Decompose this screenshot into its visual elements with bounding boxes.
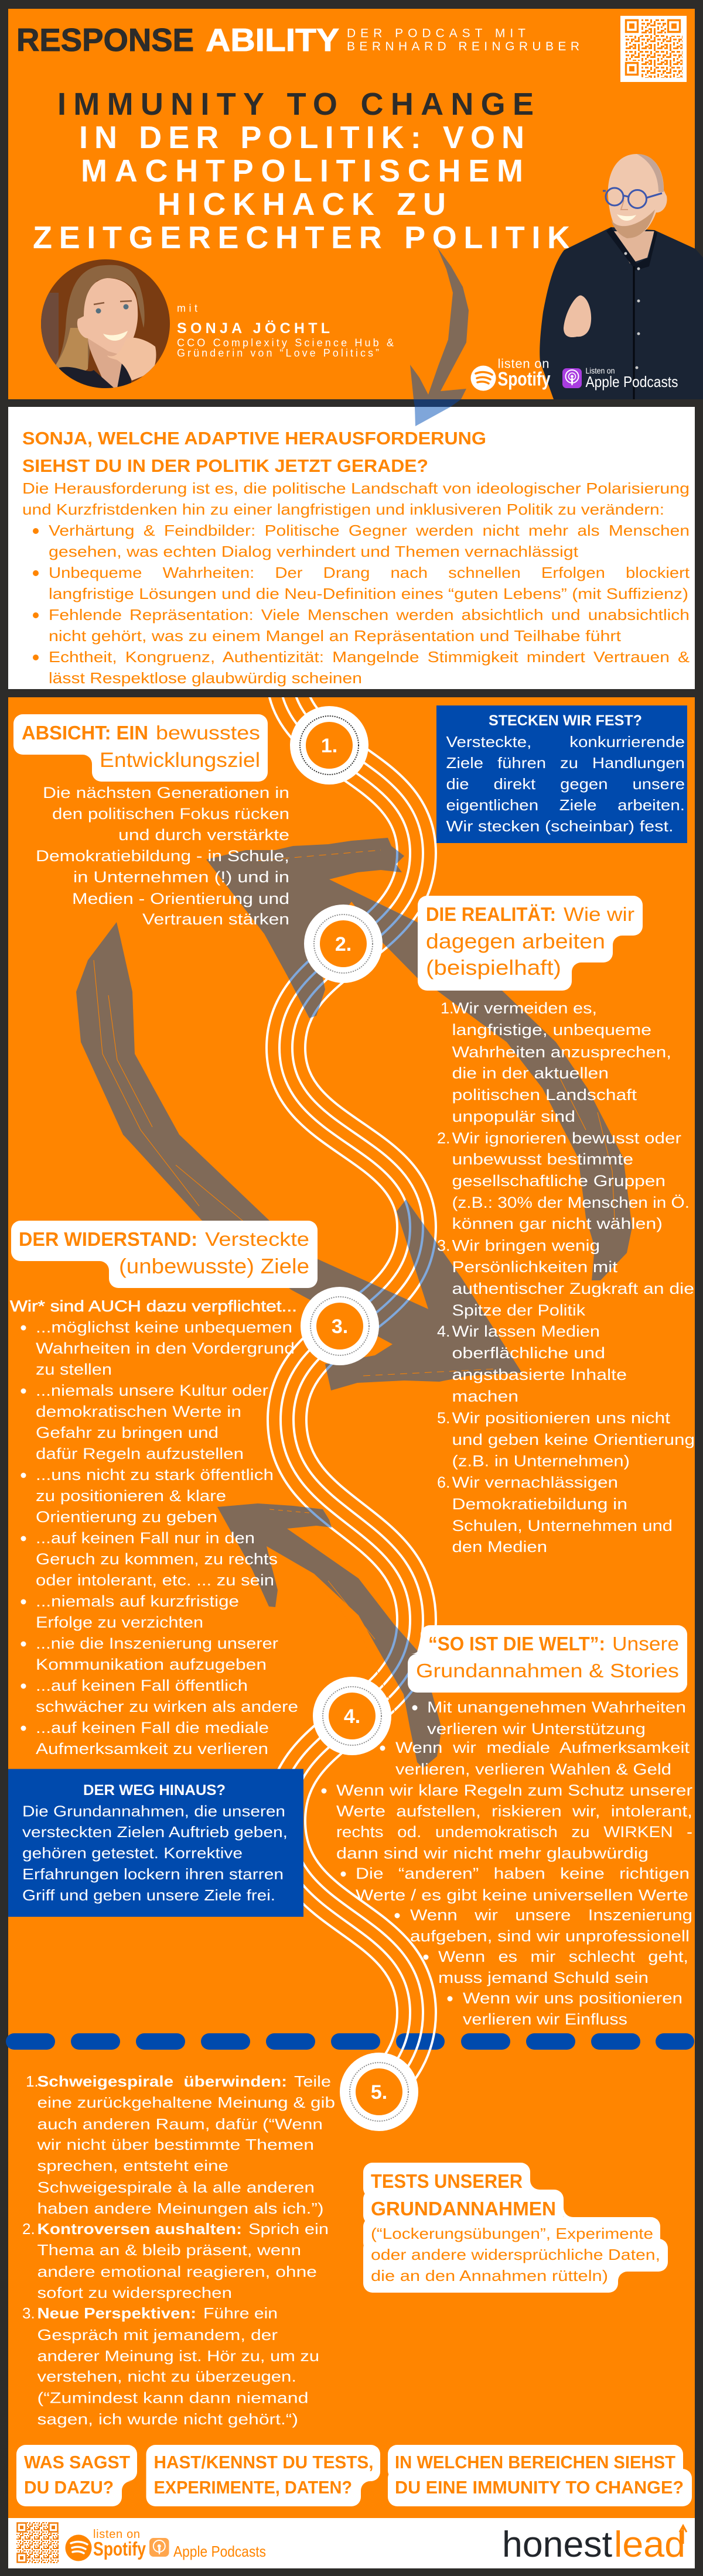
- wavy path lines: [286, 673, 417, 2092]
- list: hidden commitments: ...auf keinen Fall nur in den: [36, 1529, 255, 1547]
- step marker 5: [340, 2053, 418, 2131]
- list: assumptions and stories: Werte / es gibt keine universellen Werte: [356, 1886, 688, 1904]
- dashed divider: [6, 2033, 694, 2050]
- heading box: tests of assumptions: GRUNDANNAHMEN: [371, 2198, 556, 2219]
- numbered list: reality: authentischer Zugkraft an die: [452, 1280, 694, 1297]
- question box: tests and data: [146, 2445, 380, 2506]
- list: assumptions and stories: verlieren, verlieren Wahlen & Geld: [395, 1760, 671, 1778]
- numbered list: reality: unbewusst bestimmte: [452, 1150, 633, 1168]
- numbered list: reality: oberflächliche und: [452, 1344, 605, 1362]
- numbered list: reality: [437, 999, 695, 1556]
- presenter photo: Bernhard: [540, 154, 703, 399]
- heading box: assumptions: “SO IST DIE WELT”:: [428, 1633, 605, 1654]
- list: assumptions and stories: Die “anderen” haben keine richtigen: [356, 1865, 690, 1882]
- callout: stuck question: eigentlichen Ziele arbeiten.: [446, 796, 685, 814]
- heading box: assumptions: Grundannahmen & Stories: [416, 1660, 679, 1681]
- heading box: assumptions: Unsere: [612, 1633, 679, 1654]
- numbered list: exercises: sofort zu widersprechen: [37, 2284, 232, 2301]
- title: IN DER POLITIK: VON: [79, 120, 524, 155]
- heading box: intention: Entwicklungsziel: [100, 749, 260, 772]
- callout: the way out: gehören getestet. Korrektive: [22, 1844, 243, 1862]
- numbered list: exercises: (“Zumindest kann dann niemand: [37, 2389, 308, 2406]
- challenge bullet list: [33, 522, 690, 687]
- callout: the way out: Griff und geben unsere Ziele frei.: [22, 1886, 275, 1904]
- podcast brand wordmark: ABILITY: [206, 22, 339, 58]
- numbered list: reality: 3.: [437, 1236, 451, 1254]
- heading box: intention: ABSICHT: EIN: [22, 722, 148, 744]
- footer Spotify badge: Spotify: [93, 2538, 146, 2560]
- callout: stuck question: [436, 705, 687, 843]
- numbered list: reality: 1.: [441, 999, 454, 1017]
- numbered list: reality: politischen Landschaft: [452, 1086, 637, 1104]
- panel: footer: [8, 2518, 695, 2568]
- Apple Podcasts badge: Apple Podcasts: [586, 373, 678, 390]
- heading box: reality: DIE REALITÄT:: [426, 903, 556, 925]
- heading box: resistance: [11, 1221, 318, 1288]
- step marker 1: 1.: [321, 735, 337, 757]
- heading box: tests of assumptions: (“Lockerungsübungen”, Experimente: [371, 2225, 653, 2242]
- step marker 1: [290, 706, 368, 785]
- callout: stuck question: die direkt gegen unsere: [446, 775, 685, 793]
- numbered list: exercises: verstehen, nicht zu überzeugen.: [37, 2368, 296, 2385]
- numbered list: reality: machen: [452, 1388, 518, 1405]
- challenge bullet list: gesehen, was echten Dialog verhindert und Themen vernachlässigt: [49, 543, 579, 560]
- numbered list: exercises: [22, 2073, 335, 2428]
- heading box: resistance: DER WIDERSTAND:: [19, 1228, 197, 1250]
- list: hidden commitments: schwächer zu wirken als andere: [36, 1698, 298, 1715]
- list: assumptions and stories: muss jemand Schuld sein: [438, 1969, 649, 1986]
- numbered list: exercises: 2.: [22, 2220, 35, 2238]
- challenge bullet list: nicht gehört, was zu einem Mangel an Repräsentation und Teilhabe führt: [49, 627, 622, 645]
- heading box: tests of assumptions: die an den Annahmen rütteln): [371, 2267, 608, 2284]
- numbered list: reality: den Medien: [452, 1538, 547, 1556]
- footer QR code: [16, 2522, 59, 2563]
- step marker 2: [304, 905, 383, 983]
- heading box: intention: [13, 714, 268, 782]
- heading box: reality: (beispielhaft): [426, 955, 561, 979]
- numbered list: exercises: sprechen, entsteht eine: [37, 2157, 228, 2174]
- honestlead logo: lead: [614, 2524, 685, 2565]
- numbered list: exercises: 1.: [26, 2073, 39, 2090]
- heading box: reality: [418, 896, 643, 991]
- list: hidden commitments: ...niemals unsere Kultur oder: [36, 1382, 268, 1399]
- list: hidden commitments: Wahrheiten in den Vordergrund: [36, 1340, 295, 1357]
- question box: where do you see it: [388, 2445, 692, 2506]
- text: intention: in Unternehmen (!) und in: [73, 868, 289, 886]
- challenge bullet list: Verhärtung & Feindbilder: Politische Gegner werden nicht mehr als Menschen: [49, 522, 690, 539]
- Spotify badge: [471, 356, 551, 391]
- podcast host line: BERNHARD REINGRUBER: [347, 40, 579, 53]
- heading box: resistance: (unbewusste) Ziele: [119, 1254, 309, 1278]
- challenge bullet list: Fehlende Repräsentation: Viele Menschen werden absichtlich und unabsichtlich: [49, 606, 690, 624]
- numbered list: exercises: auch anderen Raum, dafür (“Wenn: [37, 2115, 323, 2133]
- arrow: reality feeds back to intention: [206, 838, 632, 1280]
- step marker 5: 5.: [371, 2081, 387, 2104]
- numbered list: reality: 5.: [437, 1409, 451, 1427]
- wave lines over arrows: [289, 849, 436, 1701]
- numbered list: exercises: eine zurückgehaltene Meinung & gib: [37, 2094, 335, 2111]
- arrow: hidden goals work against reality: [76, 922, 522, 1390]
- question box: where do you see it: IN WELCHEN BEREICHEN SIEHST: [395, 2452, 675, 2472]
- step marker 3: [301, 1287, 379, 1365]
- brush texture on arrows: [94, 850, 615, 1733]
- podcast brand wordmark: RESPONSE: [16, 22, 194, 58]
- list: hidden commitments: Wir* sind AUCH dazu verpflichtet...: [10, 1297, 297, 1315]
- footer Spotify badge: [66, 2528, 146, 2561]
- list: hidden commitments: zu stellen: [36, 1361, 112, 1378]
- list: hidden commitments: Gefahr zu bringen und: [36, 1424, 219, 1441]
- title: IMMUNITY TO CHANGE: [57, 87, 534, 122]
- heading box: reality: Wie wir: [564, 903, 634, 925]
- guest credentials: SONJA JÖCHTL: [177, 320, 330, 337]
- callout: the way out: Erfahrungen lockern ihren starren: [22, 1865, 284, 1883]
- Apple Podcasts badge: [562, 366, 678, 390]
- list: assumptions and stories: Wenn wir unsere Inszenierung: [410, 1906, 692, 1924]
- list: hidden commitments: demokratischen Werte in: [36, 1403, 241, 1420]
- QR code top right: [620, 16, 687, 82]
- title: MACHTPOLITISCHEM: [81, 153, 523, 189]
- numbered list: exercises: Schweigespirale à la alle anderen: [37, 2178, 315, 2196]
- numbered list: reality: langfristige, unbequeme: [452, 1021, 651, 1039]
- step marker 2: 2.: [335, 933, 352, 955]
- numbered list: reality: Wir bringen wenig: [452, 1236, 600, 1254]
- numbered list: exercises: 3.: [22, 2304, 35, 2322]
- Spotify badge: Spotify: [498, 368, 551, 390]
- footer Apple Podcasts badge: [149, 2538, 266, 2560]
- numbered list: reality: (z.B. in Unternehmen): [452, 1452, 630, 1469]
- callout: stuck question: Versteckte, konkurrierende: [446, 733, 685, 751]
- numbered list: reality: Spitze der Politik: [452, 1301, 586, 1319]
- step marker 4: 4.: [344, 1705, 360, 1728]
- numbered list: reality: Wir vernachlässigen: [452, 1474, 618, 1491]
- Apple Podcasts badge: Listen on: [586, 366, 615, 375]
- callout: the way out: [8, 1769, 303, 1917]
- footer Spotify badge: listen on: [93, 2528, 140, 2541]
- list: hidden commitments: dafür Regeln aufzustellen: [36, 1445, 244, 1462]
- list: hidden commitments: oder intolerant, etc. ... zu sein: [36, 1571, 274, 1589]
- question box: tests and data: HAST/KENNST DU TESTS,: [153, 2452, 374, 2472]
- numbered list: exercises: Thema an & bleib präsent, wenn: [37, 2241, 301, 2259]
- question box: what do you say: DU DAZU?: [24, 2477, 114, 2498]
- numbered list: reality: (z.B.: 30% der Menschen in Ö.: [452, 1194, 690, 1211]
- numbered list: exercises: Neue Perspektiven:: [37, 2304, 196, 2322]
- text: intention: Vertrauen stärken: [142, 910, 289, 928]
- text: intention: und durch verstärkte: [118, 826, 289, 844]
- challenge bullet list: langfristige Lösungen und die Neu-Definition eines “guten Lebens” (mit Suffizienz): [49, 585, 688, 602]
- list: hidden commitments: ...auf keinen Fall öffentlich: [36, 1677, 248, 1694]
- list: hidden commitments: ...uns nicht zu stark öffentlich: [36, 1466, 274, 1484]
- list: hidden commitments: Orientierung zu geben: [36, 1508, 217, 1526]
- numbered list: exercises: Sprich ein: [248, 2220, 329, 2238]
- panel: adaptive challenge: [8, 407, 695, 689]
- list: assumptions and stories: [321, 1698, 692, 2028]
- list: assumptions and stories: Mit unangenehmen Wahrheiten: [427, 1698, 686, 1716]
- callout: stuck question: Ziele führen zu Handlungen: [446, 754, 685, 772]
- callout: the way out: DER WEG HINAUS?: [83, 1782, 226, 1799]
- heading box: resistance: Versteckte: [205, 1228, 309, 1250]
- numbered list: exercises: andere emotional reagieren, ohne: [37, 2263, 317, 2280]
- numbered list: reality: Demokratiebildung in: [452, 1495, 627, 1513]
- numbered list: reality: Wir positionieren uns nicht: [452, 1409, 671, 1427]
- numbered list: reality: gesellschaftliche Gruppen: [452, 1172, 666, 1190]
- list: assumptions and stories: Werte aufstellen, riskieren wir, intolerant,: [336, 1802, 692, 1820]
- callout: the way out: versteckten Zielen Auftrieb geben,: [22, 1823, 288, 1841]
- list: assumptions and stories: verlieren wir Unterstützung: [427, 1720, 646, 1738]
- numbered list: exercises: wir nicht über bestimmte Themen: [36, 2136, 314, 2153]
- text: intention: Medien - Orientierung und: [72, 890, 289, 907]
- numbered list: reality: 4.: [437, 1323, 451, 1340]
- challenge intro text: und Kurzfristdenken hin zu einer langfristigen und inklusiveren Politik zu verändern:: [22, 501, 664, 518]
- guest credentials: mit: [177, 302, 197, 314]
- list: hidden commitments: ...auf keinen Fall die mediale: [36, 1719, 269, 1736]
- numbered list: exercises: haben andere Meinungen als ich.”): [37, 2200, 323, 2217]
- guest credentials: [177, 302, 394, 359]
- podcast brand wordmark: [16, 22, 339, 58]
- Spotify badge: listen on: [498, 356, 550, 371]
- text: intention: [36, 784, 289, 928]
- title: [33, 87, 570, 255]
- numbered list: reality: 2.: [437, 1129, 451, 1147]
- panel: podcast header: [8, 9, 703, 399]
- numbered list: reality: können gar nicht wählen): [452, 1215, 663, 1232]
- heading box: tests of assumptions: [363, 2163, 668, 2293]
- question box: what do you say: [16, 2445, 137, 2506]
- list: hidden commitments: Aufmerksamkeit zu verlieren: [36, 1740, 268, 1758]
- numbered list: exercises: Teile: [294, 2073, 331, 2090]
- numbered list: exercises: Führe ein: [203, 2304, 278, 2322]
- numbered list: reality: unpopulär sind: [452, 1108, 575, 1125]
- heading box: reality: dagegen arbeiten: [426, 929, 605, 953]
- heading box: assumptions: [408, 1625, 687, 1693]
- list: assumptions and stories: Wenn wir mediale Aufmerksamkeit: [395, 1739, 690, 1756]
- list: assumptions and stories: dann sind wir nicht mehr glaubwürdig: [336, 1844, 649, 1862]
- numbered list: reality: Schulen, Unternehmen und: [452, 1517, 673, 1534]
- footer Apple Podcasts badge: Apple Podcasts: [173, 2543, 266, 2560]
- title: HICKHACK ZU: [158, 187, 446, 222]
- honestlead logo: honest: [502, 2524, 612, 2565]
- callout: stuck question: STECKEN WIR FEST?: [489, 712, 642, 729]
- list: hidden commitments: ...nie die Inszenierung unserer: [36, 1635, 278, 1652]
- challenge heading: SONJA, WELCHE ADAPTIVE HERAUSFORDERUNG: [22, 428, 486, 448]
- heading box: intention: bewusstes: [156, 722, 260, 744]
- list: hidden commitments: Kommunikation aufzugeben: [36, 1656, 267, 1673]
- step marker 3: 3.: [332, 1316, 348, 1338]
- list: hidden commitments: [10, 1297, 298, 1758]
- question box: what do you say: WAS SAGST: [24, 2452, 130, 2472]
- question box: tests and data: EXPERIMENTE, DATEN?: [153, 2477, 352, 2498]
- podcast host line: DER PODCAST MIT: [347, 27, 525, 40]
- text: intention: Demokratiebildung - in Schule,: [36, 847, 289, 865]
- callout: stuck question: Wir stecken (scheinbar) fest.: [446, 817, 674, 835]
- challenge heading: SIEHST DU IN DER POLITIK JETZT GERADE?: [22, 455, 428, 476]
- arrow: assumptions drive hidden goals: [217, 1503, 442, 1768]
- numbered list: exercises: Schweigespirale überwinden:: [37, 2073, 287, 2090]
- list: hidden commitments: ...niemals auf kurzfristige: [36, 1592, 239, 1610]
- challenge bullet list: Echtheit, Kongruenz, Authentizität: Mangelnde Stimmigkeit mindert Vertrauen &: [49, 648, 690, 666]
- challenge intro text: [22, 479, 690, 518]
- numbered list: reality: Wahrheiten anzusprechen,: [452, 1043, 671, 1061]
- list: assumptions and stories: Wenn es mir schlecht geht,: [438, 1948, 688, 1965]
- numbered list: reality: die in der aktuellen: [452, 1064, 609, 1082]
- list: assumptions and stories: Wenn wir uns positionieren: [463, 1989, 682, 2007]
- text: intention: Die nächsten Generationen in: [43, 784, 289, 801]
- challenge intro text: Die Herausforderung ist es, die politische Landschaft von ideologischer Polarisierung: [22, 479, 690, 497]
- title: ZEITGERECHTER POLITIK: [33, 220, 570, 255]
- numbered list: exercises: Gespräch mit jemandem, der: [37, 2326, 278, 2344]
- challenge bullet list: lässt Respektlose glaubwürdig scheinen: [49, 669, 362, 687]
- guest credentials: CCO Complexity Science Hub &: [177, 337, 394, 349]
- challenge bullet list: Unbequeme Wahrheiten: Der Drang nach schnellen Erfolgen blockiert: [49, 564, 690, 581]
- numbered list: reality: Wir ignorieren bewusst oder: [452, 1129, 681, 1147]
- text: intention: den politischen Fokus rücken: [52, 805, 289, 823]
- heading box: tests of assumptions: TESTS UNSERER: [371, 2170, 523, 2192]
- list: assumptions and stories: rechts od. undemokratisch zu WIRKEN -: [336, 1823, 692, 1841]
- panel: immunity map: [6, 673, 695, 2518]
- numbered list: reality: Persönlichkeiten mit: [452, 1258, 618, 1276]
- podcast host line: [347, 27, 579, 53]
- numbered list: reality: Wir vermeiden es,: [452, 999, 597, 1017]
- list: hidden commitments: Geruch zu kommen, zu rechts: [36, 1550, 278, 1568]
- list: hidden commitments: Erfolge zu verzichten: [36, 1614, 203, 1631]
- list: assumptions and stories: aufgeben, sind wir unprofessionell: [410, 1927, 690, 1945]
- numbered list: exercises: Kontroversen aushalten:: [37, 2220, 242, 2238]
- numbered list: reality: angstbasierte Inhalte: [452, 1366, 627, 1383]
- numbered list: reality: 6.: [437, 1474, 451, 1491]
- guest credentials: Gründerin von “Love Politics”: [177, 347, 379, 359]
- list: hidden commitments: zu positionieren & klare: [36, 1487, 226, 1505]
- callout: the way out: Die Grundannahmen, die unseren: [22, 1802, 285, 1820]
- numbered list: reality: Wir lassen Medien: [452, 1323, 600, 1340]
- honestlead logo: [502, 2524, 687, 2565]
- wave lines over divider: [396, 2033, 435, 2050]
- guest portrait: Sonja: [41, 259, 170, 388]
- numbered list: reality: und geben keine Orientierung: [452, 1431, 695, 1448]
- challenge heading: [22, 428, 486, 476]
- step marker 4: [313, 1677, 391, 1755]
- list: assumptions and stories: Wenn wir klare Regeln zum Schutz unserer: [336, 1782, 692, 1799]
- list: assumptions and stories: verlieren wir Einfluss: [463, 2010, 627, 2028]
- arrow: header to challenge panel: [410, 247, 469, 426]
- question box: where do you see it: DU EINE IMMUNITY TO CHANGE?: [395, 2477, 684, 2498]
- list: hidden commitments: ...möglichst keine unbequemen: [36, 1318, 292, 1336]
- numbered list: exercises: anderer Meinung ist. Hör zu, um zu: [37, 2347, 319, 2365]
- heading box: tests of assumptions: oder andere widersprüchliche Daten,: [371, 2246, 660, 2263]
- numbered list: exercises: sagen, ich wurde nicht gehört.“): [37, 2410, 298, 2428]
